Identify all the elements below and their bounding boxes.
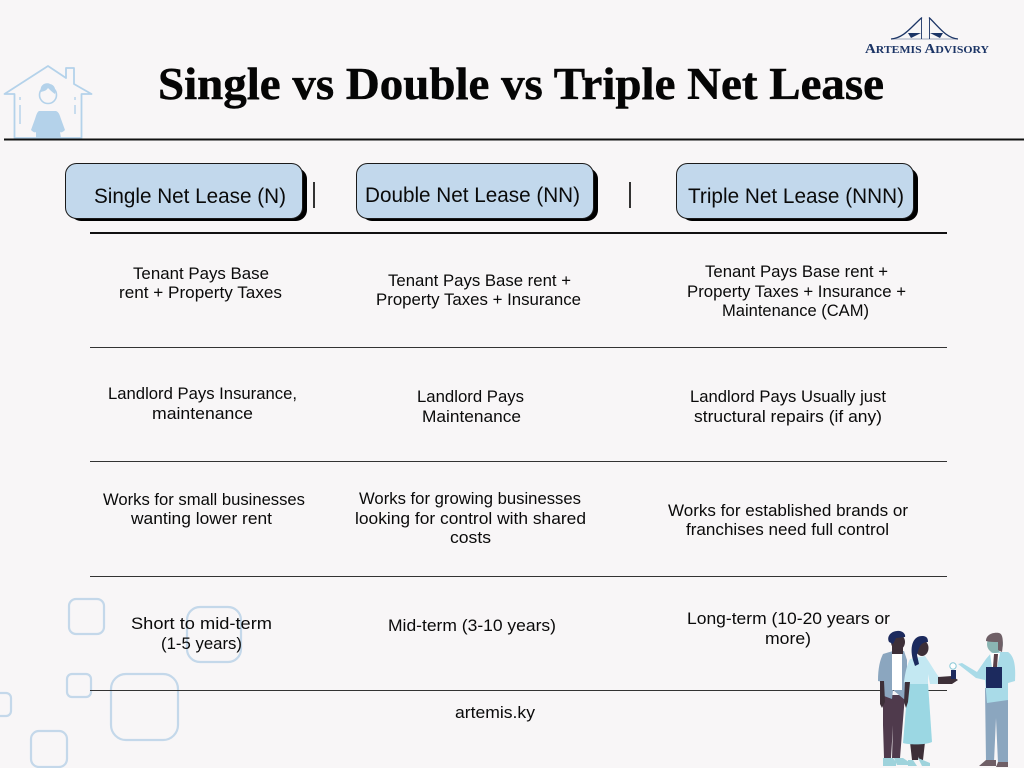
row: who it works for: franchises need full control [686,521,889,539]
row: lease term: Short to mid-term [131,615,272,633]
row: what the tenant pays: Tenant Pays Base rent + [705,263,888,281]
row: what the landlord pays: Landlord Pays Usually just [690,388,886,406]
row: what the tenant pays: Maintenance (CAM) [722,302,869,320]
row: who it works for: costs [450,529,491,547]
title: Single vs Double vs Triple Net Lease [158,59,884,109]
logo: Artemis Advisory: ARTEMIS ADVISORY [865,42,989,57]
row: who it works for [103,490,909,547]
logo: Artemis Advisory [865,18,989,57]
header rule [4,138,1024,140]
row: who it works for: wanting lower rent [130,510,272,528]
column header: single net lease [66,164,307,221]
row: what the landlord pays: Landlord Pays Insurance, [108,385,297,403]
column header: triple net lease: Triple Net Lease (NNN) [688,185,904,208]
icon: house with person [4,66,92,138]
decorative rounded squares [0,599,241,767]
row: what the tenant pays: rent + Property Taxes [119,284,282,302]
row: what the tenant pays: Property Taxes + Insurance + [687,283,906,301]
column header: triple net lease [676,164,918,221]
column header: double net lease [356,164,598,221]
row: lease term [131,610,891,653]
row: lease term: more) [765,630,811,648]
row: who it works for: Works for established brands or [668,502,909,520]
man [878,631,909,766]
footer website: artemis.ky [455,704,536,722]
illustration: couple receiving keys from agent [878,631,1015,767]
row: who it works for: looking for control with shared [355,510,586,528]
row: who it works for: Works for small businesses [103,491,305,509]
row: what the landlord pays: Landlord Pays [417,388,524,406]
row: who it works for: Works for growing businesses [359,490,581,508]
row: what the tenant pays: Property Taxes + Insurance [376,291,581,309]
row: lease term: Mid-term (3-10 years) [388,617,556,635]
keys [950,663,956,679]
woman [903,636,958,766]
row: lease term: (1-5 years) [161,635,242,653]
row: what the tenant pays [119,263,906,320]
column header: double net lease: Double Net Lease (NN) [365,184,580,207]
row: what the landlord pays: structural repairs (if any) [694,408,882,426]
row: what the tenant pays: Tenant Pays Base [133,265,269,283]
agent [958,633,1015,767]
row: lease term: Long-term (10-20 years or [687,610,891,628]
divider [313,182,315,208]
row: what the landlord pays: maintenance [152,405,253,423]
divider [629,182,631,208]
table rules [90,232,947,691]
row: what the landlord pays: Maintenance [422,408,521,426]
row: what the landlord pays [108,385,886,426]
column header: single net lease: Single Net Lease (N) [94,185,286,208]
row: what the tenant pays: Tenant Pays Base rent + [388,272,571,290]
